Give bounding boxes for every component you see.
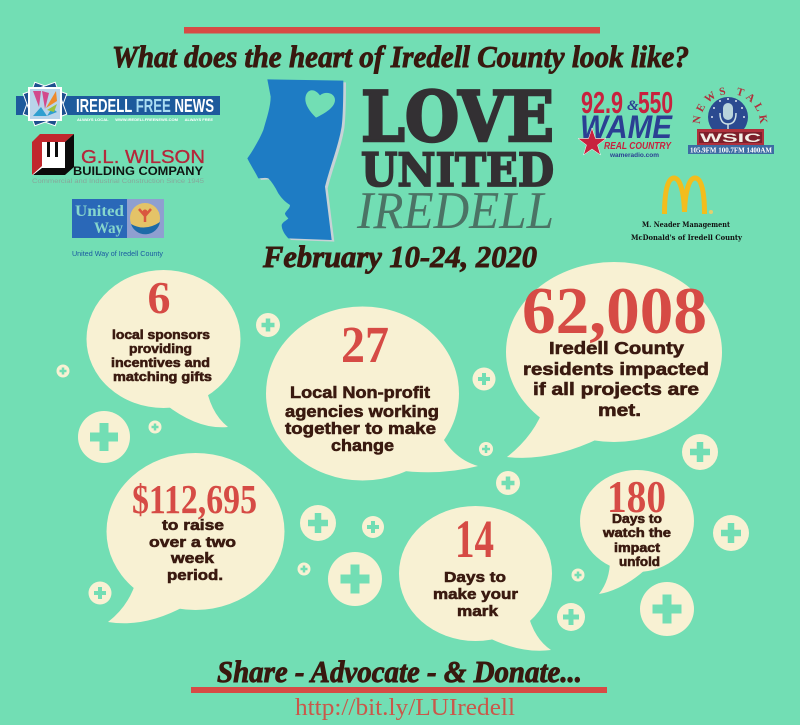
speech bubble: 180 days: unfold bbox=[619, 555, 660, 569]
wordmark: Love United Iredell: IREDELL bbox=[356, 182, 554, 240]
speech bubble: $112,695 to raise: to raise bbox=[162, 517, 224, 534]
logo: G.L. Wilson Building Company: Commercial and Industrial Construction Since 1945 bbox=[32, 178, 204, 185]
speech bubble: 27 agencies: 27 bbox=[341, 317, 389, 374]
logo: Iredell Free News: ALWAYS LOCAL WWW.IREDELLFREENEWS.COM ALWAYS FREE bbox=[77, 117, 213, 122]
speech bubble: 180 days: impact bbox=[614, 541, 661, 555]
speech bubble: $112,695 to raise bbox=[106, 453, 284, 623]
logo mark: county map face with heart bbox=[247, 79, 346, 242]
logo: G.L. Wilson Building Company: BUILDING COMPANY bbox=[73, 166, 203, 178]
speech bubble: 62,008 residents: Iredell County bbox=[549, 338, 684, 358]
logo: G.L. Wilson Building Company bbox=[32, 134, 205, 185]
speech bubble: 14 days bbox=[399, 506, 552, 651]
speech bubble: 6 sponsors: local sponsors bbox=[112, 327, 210, 342]
title: What does the heart of Iredell County look like? bbox=[112, 39, 689, 74]
speech bubble: 14 days: mark bbox=[457, 603, 499, 620]
speech bubble: $112,695 to raise: $112,695 bbox=[132, 476, 257, 522]
speech bubble: 62,008 residents: residents impacted bbox=[523, 359, 709, 379]
logo: WAME radio: REAL COUNTRY bbox=[604, 141, 672, 152]
speech bubble: 6 sponsors bbox=[86, 270, 240, 427]
speech bubble: 180 days: Days to bbox=[612, 512, 662, 526]
speech bubble: 6 sponsors: 6 bbox=[148, 272, 170, 323]
logo: WSIC news talk bbox=[688, 88, 774, 154]
call to action: Share - Advocate - & Donate... bbox=[217, 654, 582, 689]
speech bubble: 14 days: 14 bbox=[455, 509, 494, 569]
speech bubble: 14 days: Days to bbox=[444, 569, 506, 586]
speech bubble: 27 agencies: agencies working bbox=[285, 402, 439, 421]
link: http://bit.ly/LUIredell bbox=[295, 695, 515, 721]
speech bubble: 27 agencies bbox=[266, 306, 478, 480]
logo: WAME radio bbox=[578, 85, 674, 159]
logo: Iredell Free News bbox=[16, 82, 220, 126]
logo: WSIC news talk: 105.9FM 100.7FM 1400AM bbox=[690, 146, 772, 154]
logo: Iredell Free News: IREDELL FREE NEWS bbox=[76, 96, 214, 116]
logo: WAME radio: wameradio.com bbox=[609, 152, 659, 159]
speech bubble: $112,695 to raise: week bbox=[170, 550, 215, 567]
logo: United Way: United bbox=[75, 203, 124, 220]
speech bubble: 180 days bbox=[580, 470, 694, 594]
speech bubble: 27 agencies: change bbox=[331, 436, 394, 455]
bottom red bar bbox=[191, 687, 607, 693]
wordmark: Love United Iredell: LOVE bbox=[361, 77, 554, 158]
speech bubble: 62,008 residents bbox=[506, 262, 722, 458]
speech bubble: 62,008 residents: 62,008 bbox=[522, 274, 707, 348]
speech bubble: 27 agencies: together to make bbox=[285, 419, 436, 438]
speech bubble: 180 days: 180 bbox=[607, 472, 666, 522]
wordmark: Love United Iredell: UNITED bbox=[361, 143, 554, 197]
logo: United Way: Way bbox=[94, 220, 123, 237]
speech bubble: $112,695 to raise: period. bbox=[167, 567, 223, 584]
wordmark: Love United Iredell bbox=[356, 77, 554, 240]
logo: G.L. Wilson Building Company: G.L. WILSON bbox=[81, 147, 205, 167]
logo: WAME radio: & bbox=[627, 98, 639, 114]
logo: WAME radio: WAME bbox=[580, 109, 674, 145]
logo: McDonald's: McDonald's of Iredell County bbox=[631, 233, 743, 242]
speech bubble: 14 days: make your bbox=[433, 586, 518, 603]
logo: United Way bbox=[72, 199, 164, 258]
logo: WAME radio: 550 bbox=[638, 85, 673, 120]
logo: McDonald's bbox=[631, 178, 743, 242]
logo: WAME radio: 92.9 bbox=[581, 85, 623, 120]
logo: United Way: United Way of Iredell County bbox=[72, 249, 163, 258]
logo: McDonald's: M. Neader Management bbox=[642, 220, 731, 229]
top red bar bbox=[184, 27, 600, 34]
speech bubble: 6 sponsors: matching gifts bbox=[113, 369, 212, 384]
speech bubble: 62,008 residents: if all projects are bbox=[533, 379, 699, 399]
logo: WSIC news talk: NEWS TALK bbox=[692, 88, 768, 124]
logo: WSIC news talk: WSIC bbox=[700, 131, 762, 145]
speech bubble: 180 days: watch the bbox=[602, 526, 671, 540]
date: February 10-24, 2020 bbox=[262, 239, 537, 274]
speech bubble: 6 sponsors: providing bbox=[129, 341, 192, 356]
speech bubble: 27 agencies: Local Non-profit bbox=[290, 383, 430, 402]
speech bubble: 62,008 residents: met. bbox=[598, 400, 641, 420]
speech bubble: $112,695 to raise: over a two bbox=[149, 534, 236, 551]
decorative plus icons bbox=[56, 313, 749, 636]
speech bubble: 6 sponsors: incentives and bbox=[111, 355, 210, 370]
